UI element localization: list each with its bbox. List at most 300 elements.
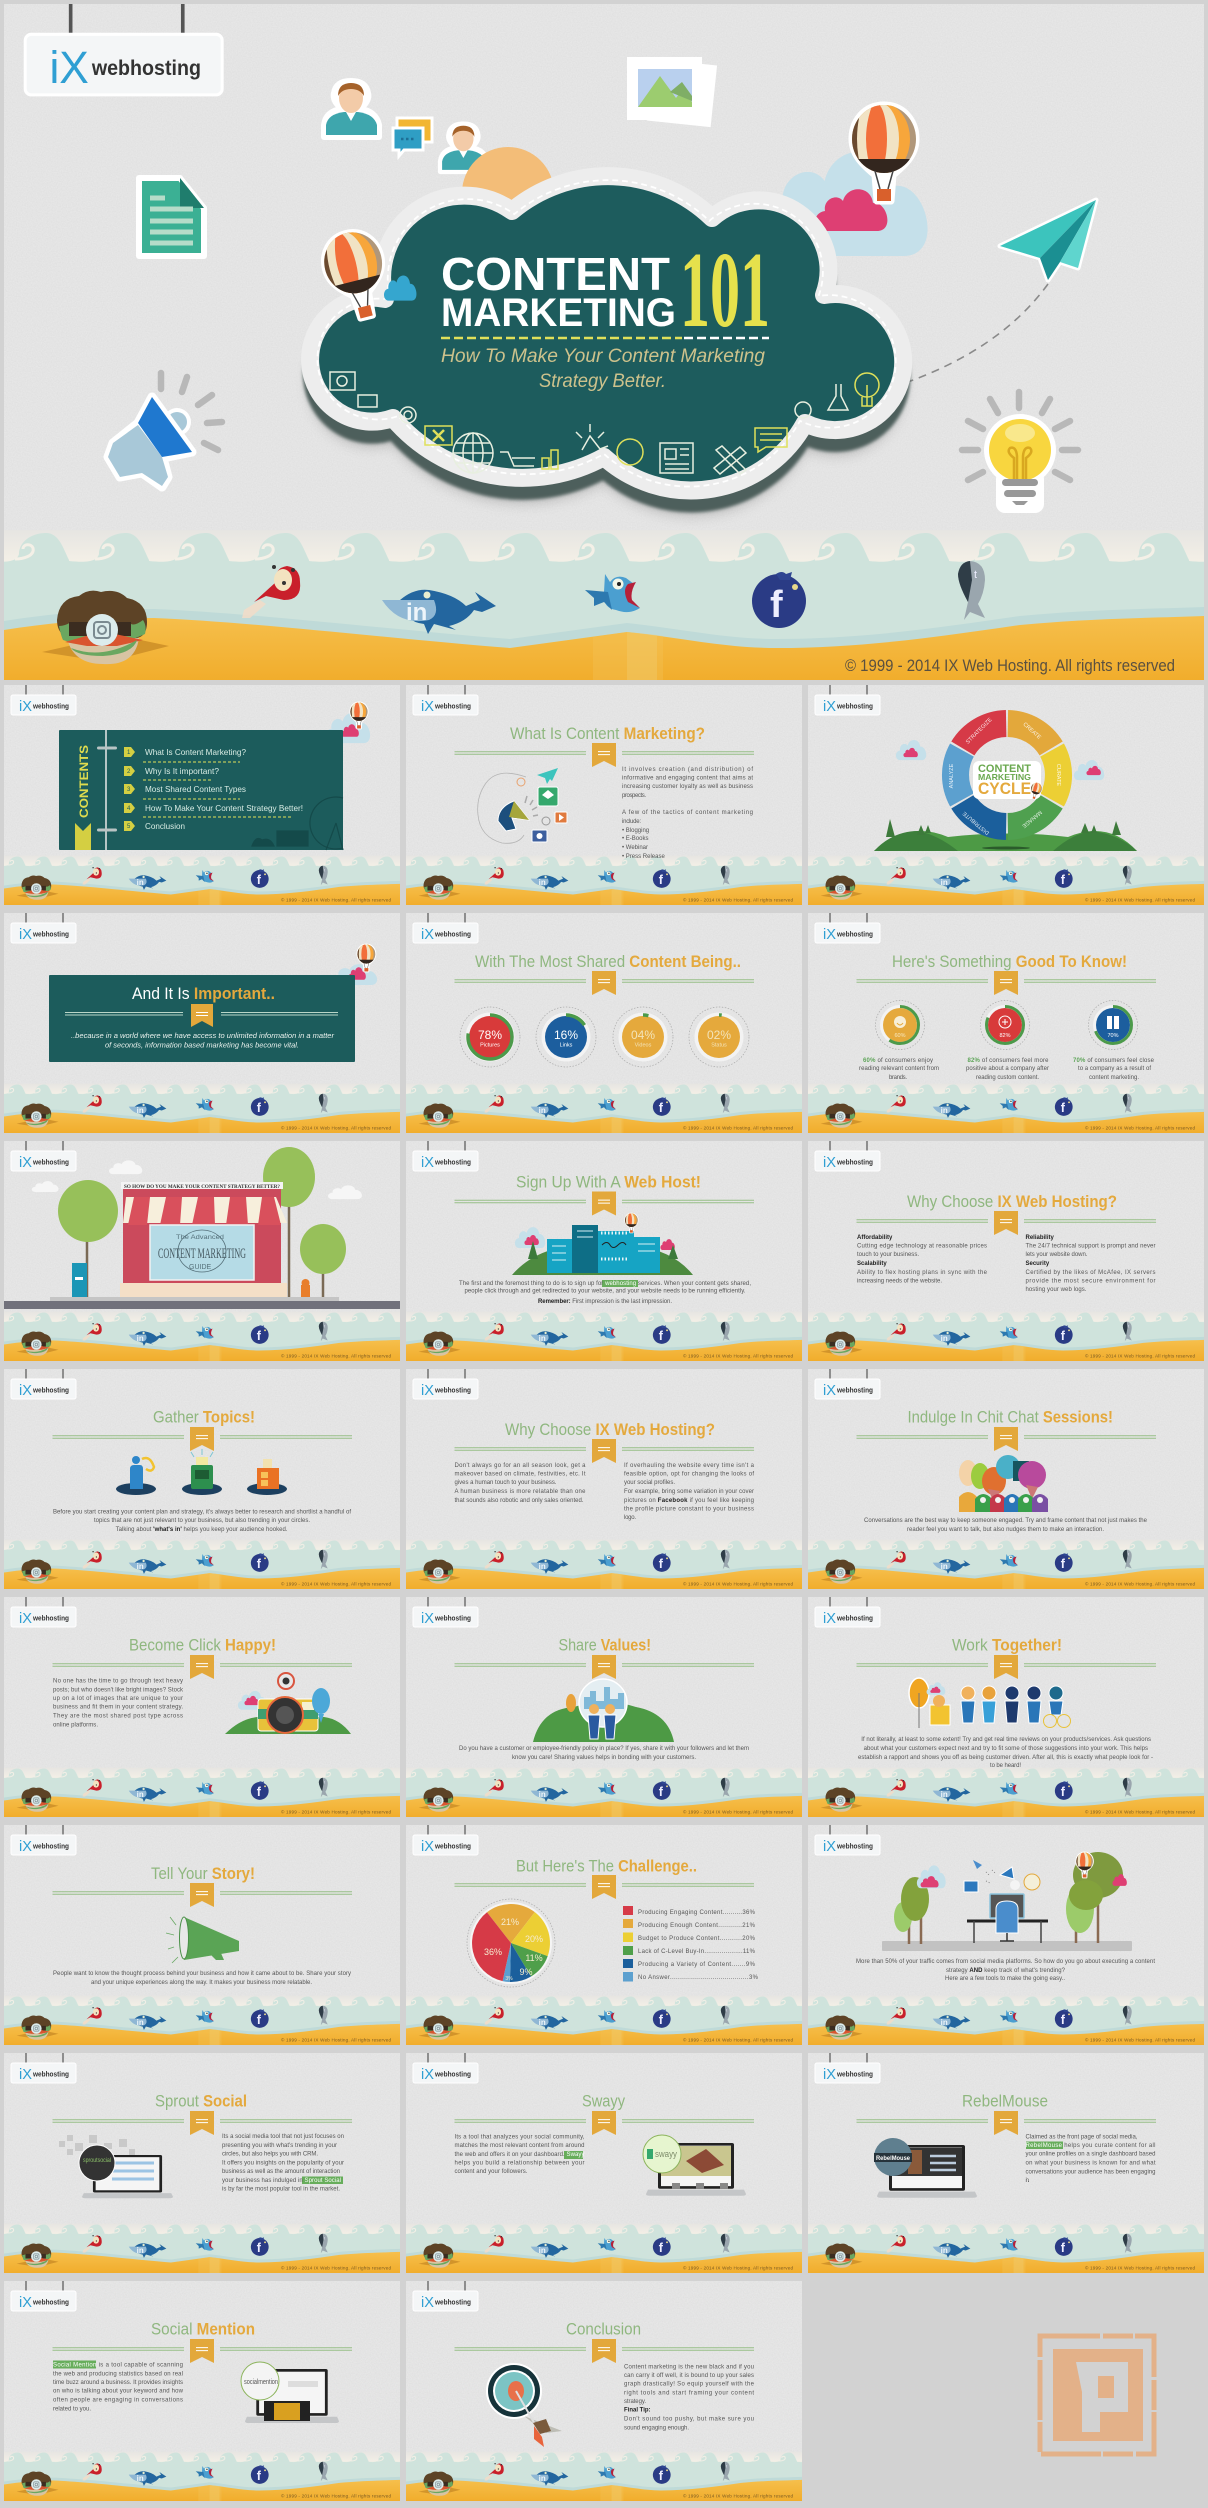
slide: conclusion bbox=[406, 2281, 802, 2501]
logo: webhosting bbox=[32, 1388, 69, 1394]
right column text: Reliability bbox=[1026, 1235, 1055, 1241]
logo: iX bbox=[19, 1382, 32, 1399]
right column text: The 24/7 technical support is prompt and never bbox=[1026, 1244, 1156, 1250]
logo bbox=[11, 1369, 76, 1399]
left column text bbox=[857, 1235, 988, 1285]
contents list: 2 bbox=[127, 769, 131, 775]
footer bbox=[4, 2224, 400, 2273]
right column text bbox=[1026, 1235, 1156, 1293]
body text: Before you start creating your content plan and strategy, it's always better to research and shortlist a handful of bbox=[53, 1510, 351, 1516]
heading: Sign Up With A Web Host! bbox=[516, 1172, 701, 1192]
yellow ribbon bbox=[75, 823, 91, 850]
body text: is by far the most popular tool in the market. bbox=[222, 2187, 340, 2193]
footer bbox=[4, 1996, 400, 2045]
logo: webhosting bbox=[836, 1388, 873, 1394]
logo: webhosting bbox=[32, 2072, 69, 2078]
right column text: Security bbox=[1026, 1261, 1050, 1267]
slide: contents bbox=[4, 685, 400, 905]
logo: webhosting bbox=[836, 2072, 873, 2078]
slide: social mention bbox=[4, 2281, 400, 2501]
title text: CONTENT bbox=[441, 248, 670, 300]
clouds and balloon bbox=[332, 944, 377, 985]
footer bbox=[406, 1312, 802, 1361]
body text: establish a rapport and shows you off as being customer driven. After all, this is exactly what people look for - bbox=[858, 1755, 1153, 1761]
body text: content and your followers. bbox=[454, 2169, 528, 2175]
body text: business as well as the amount of interaction bbox=[222, 2169, 340, 2175]
body text bbox=[1026, 2134, 1156, 2184]
body text: often people are engaging in conversations bbox=[53, 2398, 183, 2404]
contents list bbox=[124, 747, 303, 831]
watermark stamp bbox=[1040, 2336, 1154, 2454]
footer: © 1999 - 2014 IX Web Hosting. All rights reserved bbox=[281, 1808, 391, 1814]
left column text: that sounds also robotic and only sales oriented. bbox=[454, 1498, 584, 1504]
icon: people and chat bbox=[324, 81, 487, 172]
logo: webhosting bbox=[32, 2300, 69, 2306]
body text: It offers you insights on the popularity of your bbox=[222, 2161, 344, 2167]
slide: social media traffic bbox=[808, 1825, 1204, 2045]
logo: webhosting bbox=[434, 932, 471, 938]
small balloon bbox=[1028, 781, 1044, 800]
contents list: Why Is It important? bbox=[145, 766, 219, 776]
body text: know you care! Sharing values helps in bonding with your customers. bbox=[512, 1755, 696, 1761]
body text: More than 50% of your traffic comes from social media platforms. So how do you go about executing a content bbox=[856, 1959, 1155, 1965]
body text: • Blogging bbox=[622, 828, 649, 834]
right column text: If overhauling the website every time isn't a bbox=[624, 1463, 755, 1469]
hydrant bbox=[301, 1279, 310, 1297]
illustration: laptop bbox=[59, 2135, 173, 2198]
pie chart: 36% bbox=[484, 1947, 502, 1957]
road bbox=[4, 1297, 400, 1309]
logo: iX bbox=[823, 1610, 836, 1627]
footer bbox=[406, 1084, 802, 1133]
heading: Swayy bbox=[582, 2092, 625, 2110]
footer bbox=[4, 1312, 400, 1361]
pie chart bbox=[467, 1899, 555, 1987]
illustration: laptop: sproutsocial bbox=[83, 2158, 111, 2164]
divider with ribbon bbox=[454, 743, 754, 767]
donut: videos 04% bbox=[613, 1007, 673, 1067]
cycle label: MARKETING bbox=[978, 772, 1031, 782]
right column text bbox=[624, 1463, 755, 1521]
clouds bbox=[896, 740, 1104, 780]
vertical label: CONTENTS bbox=[77, 745, 91, 818]
subtitle: Strategy Better. bbox=[539, 371, 666, 392]
body text: They are the most shared post type across bbox=[53, 1714, 183, 1720]
body text: Talking about 'what's in' helps you keep your audience hooked. bbox=[116, 1527, 288, 1533]
logo bbox=[413, 1825, 478, 1855]
cycle ring: DISTRIBUTE bbox=[962, 810, 991, 836]
footer: © 1999 - 2014 IX Web Hosting. All rights reserved bbox=[683, 1808, 793, 1814]
illustration: servers bbox=[512, 1213, 693, 1275]
body text: right tools and start framing your content bbox=[624, 2390, 754, 2396]
donut: status 02%: 02% bbox=[707, 1028, 731, 1042]
logo bbox=[11, 1597, 76, 1627]
donut: pictures 78%: Pictures bbox=[480, 1042, 500, 1048]
title text: 101 bbox=[680, 231, 770, 350]
body text: your online profiles on a single dashboard based bbox=[1026, 2152, 1156, 2158]
logo bbox=[11, 2053, 76, 2083]
logo bbox=[815, 1597, 880, 1627]
divider with ribbon bbox=[856, 971, 1156, 995]
left column text: Affordability bbox=[857, 1235, 893, 1241]
heading: Conclusion bbox=[566, 2320, 641, 2338]
right column text: lets your website down. bbox=[1026, 1252, 1088, 1258]
logo: webhosting bbox=[434, 2300, 471, 2306]
body text: Social Mention is a tool capable of scanning bbox=[53, 2363, 183, 2369]
icon: balloon right bbox=[847, 103, 921, 201]
mailbox bbox=[72, 1263, 87, 1297]
body text: increasing customer loyalty as well as business bbox=[622, 784, 753, 790]
body text bbox=[459, 1280, 751, 1305]
logo: webhosting bbox=[836, 1616, 873, 1622]
footer: © 1999 - 2014 IX Web Hosting. All rights reserved bbox=[1085, 1352, 1195, 1358]
logo bbox=[25, 4, 222, 95]
logo bbox=[11, 2281, 76, 2311]
divider with ribbon bbox=[52, 1655, 352, 1679]
footer: © 1999 - 2014 IX Web Hosting. All rights reserved bbox=[1085, 2264, 1195, 2270]
body text: the web and producing statistics based on real bbox=[53, 2371, 183, 2377]
logo bbox=[11, 913, 76, 943]
left column text: touch to your business. bbox=[857, 1252, 919, 1258]
icon: small cloud bbox=[384, 276, 416, 301]
body text: Don't sound too pushy, but make sure you bbox=[624, 2417, 754, 2423]
icon: photos bbox=[627, 57, 717, 127]
stat text: 82% bbox=[966, 1058, 1049, 1081]
logo bbox=[11, 1825, 76, 1855]
body text: Do you have a customer or employee-friendly policy in place? If yes, share it with your followers and let them bbox=[459, 1746, 749, 1752]
logo: iX bbox=[823, 2066, 836, 2083]
panel text: ..because in a world where we have access to unlimited information in a matter bbox=[71, 1031, 335, 1040]
logo bbox=[815, 685, 880, 715]
logo: iX bbox=[823, 1382, 836, 1399]
body text: Remember: First impression is the last impression. bbox=[538, 1299, 672, 1305]
icon: person with magnifier bbox=[116, 1456, 156, 1495]
body text: People want to know the thought process behind your business and how it came about to be. Share your story bbox=[53, 1971, 351, 1977]
footer bbox=[808, 1996, 1204, 2045]
footer bbox=[4, 2452, 400, 2501]
right column text: feasible option, opt for changing the looks of bbox=[624, 1472, 754, 1478]
footer: © 1999 - 2014 IX Web Hosting. All rights reserved bbox=[281, 2036, 391, 2042]
donut: pictures 78% bbox=[460, 1007, 520, 1067]
stat text: 70% bbox=[1073, 1058, 1155, 1081]
subtitle bbox=[441, 346, 765, 392]
store awning bbox=[123, 1197, 287, 1225]
body text: posts; but who doesn't like bright images? Stock bbox=[53, 1687, 184, 1693]
heading: With The Most Shared Content Being.. bbox=[475, 952, 741, 971]
footer: © 1999 - 2014 IX Web Hosting. All rights reserved bbox=[683, 2264, 793, 2270]
logo: iX bbox=[823, 698, 836, 715]
contents list: 5 bbox=[127, 824, 131, 830]
logo: iX bbox=[421, 1154, 434, 1171]
right column text: hosting your web logs. bbox=[1026, 1287, 1087, 1293]
store sign: SO HOW DO YOU MAKE YOUR CONTENT STRATEGY BETTER? bbox=[124, 1185, 281, 1190]
right column text: your social profiles. bbox=[624, 1480, 675, 1486]
logo: iX bbox=[19, 2066, 32, 2083]
stat circle: 60%: 60% bbox=[894, 1033, 906, 1039]
stat text: 82%: reading custom content. bbox=[976, 1075, 1039, 1081]
donut: videos 04%: 04% bbox=[631, 1028, 655, 1042]
logo: iX bbox=[421, 698, 434, 715]
heading: Become Click Happy! bbox=[129, 1636, 276, 1654]
icon: megaphone bbox=[108, 373, 222, 487]
stat text: 60%: brands. bbox=[889, 1075, 907, 1081]
hero slide: Content Marketing 101 bbox=[4, 4, 1204, 680]
body text: strategy AND keep track of what's trending? bbox=[946, 1968, 1066, 1974]
heading: Social Mention bbox=[151, 2320, 255, 2338]
contents list: 3 bbox=[127, 787, 131, 793]
body text: matches the most relevant content from around bbox=[454, 2143, 584, 2149]
footer: © 1999 - 2014 IX Web Hosting. All rights reserved bbox=[683, 1352, 793, 1358]
left column text bbox=[454, 1463, 586, 1504]
body text: reader feel you want to talk, but also nudges them to make an interaction. bbox=[907, 1527, 1104, 1533]
logo: webhosting bbox=[32, 932, 69, 938]
heading: Work Together! bbox=[952, 1636, 1062, 1654]
illustration: people on green hill bbox=[533, 1679, 674, 1742]
footer: © 1999 - 2014 IX Web Hosting. All rights reserved bbox=[683, 896, 793, 902]
slide: sign up with a web host bbox=[406, 1141, 802, 1361]
storefront building bbox=[120, 1182, 287, 1297]
body text: If not literally, at least to some extent! Try and get real time reviews on your products/services. Ask questions bbox=[861, 1737, 1151, 1743]
divider with ribbon bbox=[454, 1875, 754, 1899]
body text: business and fit them in your content strategy. bbox=[53, 1705, 183, 1711]
footer bbox=[406, 2224, 802, 2273]
body text bbox=[459, 1746, 749, 1761]
left column text: makeover based on climate, festivities, etc. It bbox=[454, 1472, 586, 1478]
footer bbox=[808, 2224, 1204, 2273]
heading: Indulge In Chit Chat Sessions! bbox=[908, 1408, 1113, 1426]
logo bbox=[815, 1141, 880, 1171]
stat circle: 82% bbox=[980, 1000, 1030, 1050]
icon: green megaphone bbox=[166, 1917, 239, 1963]
body text: Its a tool that analyzes your social community, bbox=[454, 2134, 585, 2140]
slide: why choose ix web hosting (looks) bbox=[406, 1369, 802, 1589]
footer: © 1999 - 2014 IX Web Hosting. All rights reserved bbox=[1085, 2036, 1195, 2042]
body text: up on a lot of images that are unique to your bbox=[53, 1696, 183, 1702]
stat text: 82%: positive about a company after bbox=[966, 1066, 1049, 1072]
body text: include: bbox=[622, 819, 641, 825]
donut: links 16%: Links bbox=[560, 1042, 573, 1048]
title cloud bbox=[310, 176, 903, 514]
divider with ribbon bbox=[856, 1211, 1156, 1235]
body text bbox=[624, 2364, 755, 2431]
illustration: target with arrow bbox=[486, 2363, 562, 2447]
divider with ribbon bbox=[454, 1439, 754, 1463]
logo: webhosting bbox=[836, 1844, 873, 1850]
contents list: What Is Content Marketing? bbox=[145, 747, 246, 757]
body text: Its a social media tool that not just focuses on bbox=[222, 2134, 344, 2140]
white clouds bbox=[32, 1160, 362, 1199]
footer: © 1999 - 2014 IX Web Hosting. All rights reserved bbox=[281, 1352, 391, 1358]
body text: on who is talking about your keyword and how bbox=[53, 2389, 184, 2395]
contents list: Most Shared Content Types bbox=[145, 784, 246, 794]
stat text: 70%: 70% of consumers feel close bbox=[1073, 1058, 1155, 1064]
legend: Lack of C-Level Buy-In....................11% bbox=[638, 1949, 756, 1955]
icons along cloud bottom edge bbox=[330, 372, 879, 474]
body text: strategy. bbox=[624, 2399, 646, 2405]
slide: chit chat sessions bbox=[808, 1369, 1204, 1589]
footer: © 1999 - 2014 IX Web Hosting. All rights reserved bbox=[281, 2492, 391, 2498]
panel text bbox=[71, 1031, 335, 1050]
footer: © 1999 - 2014 IX Web Hosting. All rights reserved bbox=[683, 2036, 793, 2042]
illustration: laptop bbox=[241, 2362, 339, 2423]
body text: related to you. bbox=[53, 2406, 91, 2412]
body text: Conversations are the best way to keep someone engaged. Try and frame content that not just makes the bbox=[864, 1518, 1148, 1524]
legend: No Answer.......................................3% bbox=[638, 1975, 759, 1981]
panel: important bbox=[49, 975, 355, 1062]
legend: Budget to Produce Content...........20% bbox=[638, 1936, 756, 1942]
body text: time buzz around a business. It provides insights bbox=[53, 2380, 183, 2386]
store sign bbox=[121, 1182, 283, 1190]
slide: swayy bbox=[406, 2053, 802, 2273]
logo bbox=[413, 2053, 478, 2083]
illustration: camera on hill bbox=[225, 1673, 351, 1734]
illustration: chatting people bbox=[959, 1455, 1048, 1512]
divider with ribbon bbox=[454, 971, 754, 995]
legend: Producing Enough Content............21% bbox=[638, 1923, 756, 1929]
logo bbox=[11, 1141, 76, 1171]
body text: A few of the tactics of content marketing bbox=[622, 810, 753, 816]
pie chart: 9% bbox=[519, 1967, 533, 1977]
slide: work together bbox=[808, 1597, 1204, 1817]
footer: © 1999 - 2014 IX Web Hosting. All rights reserved bbox=[683, 2492, 793, 2498]
donut: status 02% bbox=[689, 1007, 749, 1067]
logo: iX bbox=[421, 1610, 434, 1627]
illustration: person at desk under trees bbox=[882, 1852, 1132, 1951]
divider with ribbon bbox=[454, 2111, 754, 2135]
contents list: How To Make Your Content Strategy Better! bbox=[145, 803, 303, 813]
icon: orange device bbox=[247, 1459, 287, 1495]
body text: can carry it off well, it is bound to up your sales bbox=[624, 2373, 754, 2379]
logo bbox=[413, 685, 478, 715]
body text: topics that are not just relevant to your business, but also trending in your circles. bbox=[94, 1518, 310, 1524]
logo: iX bbox=[49, 42, 89, 93]
slide: storefront bbox=[4, 1141, 400, 1361]
stat text: 70%: content marketing. bbox=[1089, 1075, 1139, 1081]
body text: circles, but also helps you with CRM. bbox=[222, 2152, 318, 2158]
logo: iX bbox=[19, 698, 32, 715]
logo: webhosting bbox=[434, 1388, 471, 1394]
stat text: 60% bbox=[859, 1058, 939, 1081]
body text: conversations your audience has been engaging bbox=[1026, 2169, 1156, 2175]
body text: in. bbox=[1026, 2178, 1030, 2184]
contents list: 4 bbox=[127, 806, 131, 812]
footer bbox=[808, 1312, 1204, 1361]
slide: become click happy bbox=[4, 1597, 400, 1817]
logo: webhosting bbox=[434, 1160, 471, 1166]
slide: content marketing cycle bbox=[808, 685, 1204, 905]
logo: webhosting bbox=[91, 57, 201, 80]
footer bbox=[4, 856, 400, 905]
footer: © 1999 - 2014 IX Web Hosting. All rights reserved bbox=[1085, 1580, 1195, 1586]
slide: rebelmouse bbox=[808, 2053, 1204, 2273]
body text: to be heard! bbox=[990, 1763, 1021, 1769]
body text bbox=[222, 2134, 344, 2193]
donut: links 16%: 16% bbox=[554, 1028, 578, 1042]
footer: © 1999 - 2014 IX Web Hosting. All rights reserved bbox=[281, 1124, 391, 1130]
binder clips bbox=[97, 746, 117, 832]
divider with ribbon bbox=[856, 1427, 1156, 1451]
footer bbox=[406, 1996, 802, 2045]
city silhouette bbox=[252, 797, 343, 850]
body text bbox=[622, 767, 753, 860]
icon: balloon on cloud bbox=[313, 223, 399, 325]
body text bbox=[53, 1510, 351, 1533]
footer bbox=[4, 1768, 400, 1817]
body text: online platforms. bbox=[53, 1722, 98, 1728]
stat circle: 70%: 70% bbox=[1107, 1033, 1119, 1039]
heading: Share Values! bbox=[558, 1636, 651, 1654]
cycle ring bbox=[942, 710, 1072, 840]
divider with ribbon bbox=[454, 2339, 754, 2363]
heading: Tell Your Story! bbox=[151, 1864, 255, 1883]
panel text: of seconds, information based marketing has become vital. bbox=[105, 1040, 299, 1050]
body text bbox=[864, 1518, 1148, 1533]
footer bbox=[406, 1540, 802, 1589]
slide: gather topics bbox=[4, 1369, 400, 1589]
slide: tell your story bbox=[4, 1825, 400, 2045]
body text: about what your customers expect next and try to fit some of those suggestions into your work. This helps bbox=[864, 1746, 1148, 1752]
divider with ribbon bbox=[454, 1192, 754, 1216]
donut: pictures 78%: 78% bbox=[478, 1028, 502, 1042]
heading: Here's Something Good To Know! bbox=[892, 952, 1127, 971]
footer bbox=[406, 1768, 802, 1817]
logo: webhosting bbox=[836, 932, 873, 938]
icon: green machine bbox=[182, 1449, 222, 1495]
icon: light bulb bbox=[962, 392, 1078, 513]
body text: the web and offers it on your dashboard. Swayy bbox=[454, 2152, 584, 2158]
footer: © 1999 - 2014 IX Web Hosting. All rights reserved bbox=[1085, 896, 1195, 902]
footer: © 1999 - 2014 IX Web Hosting. All rights reserved bbox=[281, 2264, 391, 2270]
body text: prospects. bbox=[622, 793, 646, 799]
logo: webhosting bbox=[434, 2072, 471, 2078]
slide: share values bbox=[406, 1597, 802, 1817]
pie chart: 3% bbox=[505, 1976, 513, 1982]
footer: © 1999 - 2014 IX Web Hosting. All rights reserved bbox=[1085, 1808, 1195, 1814]
trees bbox=[58, 1147, 346, 1297]
body text bbox=[858, 1737, 1153, 1769]
logo: iX bbox=[19, 1838, 32, 1855]
footer bbox=[4, 1084, 400, 1133]
right column text: logo. bbox=[624, 1515, 636, 1521]
footer bbox=[808, 856, 1204, 905]
left column text: Ability to flex hosting plans in sync with the bbox=[857, 1270, 988, 1276]
left column text: gives a human touch to your business. bbox=[454, 1480, 557, 1486]
footer scene with social creatures bbox=[4, 530, 1204, 680]
body text: helps you build a relationship between your bbox=[454, 2161, 584, 2167]
body text: presenting you with what's trending in your bbox=[222, 2143, 337, 2149]
slide: what is content marketing bbox=[406, 685, 802, 905]
stat text: 60%: 60% of consumers enjoy bbox=[863, 1058, 933, 1064]
body text: • E-Books bbox=[622, 836, 648, 842]
icon: document bbox=[139, 178, 204, 256]
logo bbox=[815, 1825, 880, 1855]
body text bbox=[53, 2360, 184, 2412]
logo bbox=[413, 913, 478, 943]
logo: iX bbox=[823, 1838, 836, 1855]
logo bbox=[413, 1369, 478, 1399]
logo: webhosting bbox=[836, 1160, 873, 1166]
legend bbox=[623, 1906, 759, 1982]
logo: iX bbox=[421, 1838, 434, 1855]
cycle ring: ANALYZE bbox=[949, 763, 955, 788]
cycle label: CONTENT bbox=[978, 763, 1031, 775]
slide: most shared content bbox=[406, 913, 802, 1133]
body text: graph drastically! So equip yourself with the bbox=[624, 2382, 755, 2388]
stat circle: 60% bbox=[876, 1000, 924, 1050]
body text bbox=[454, 2134, 585, 2175]
logo: iX bbox=[421, 1382, 434, 1399]
body text: people click through and get redirected to your website, and your website needs to be running efficiently. bbox=[464, 1288, 746, 1294]
